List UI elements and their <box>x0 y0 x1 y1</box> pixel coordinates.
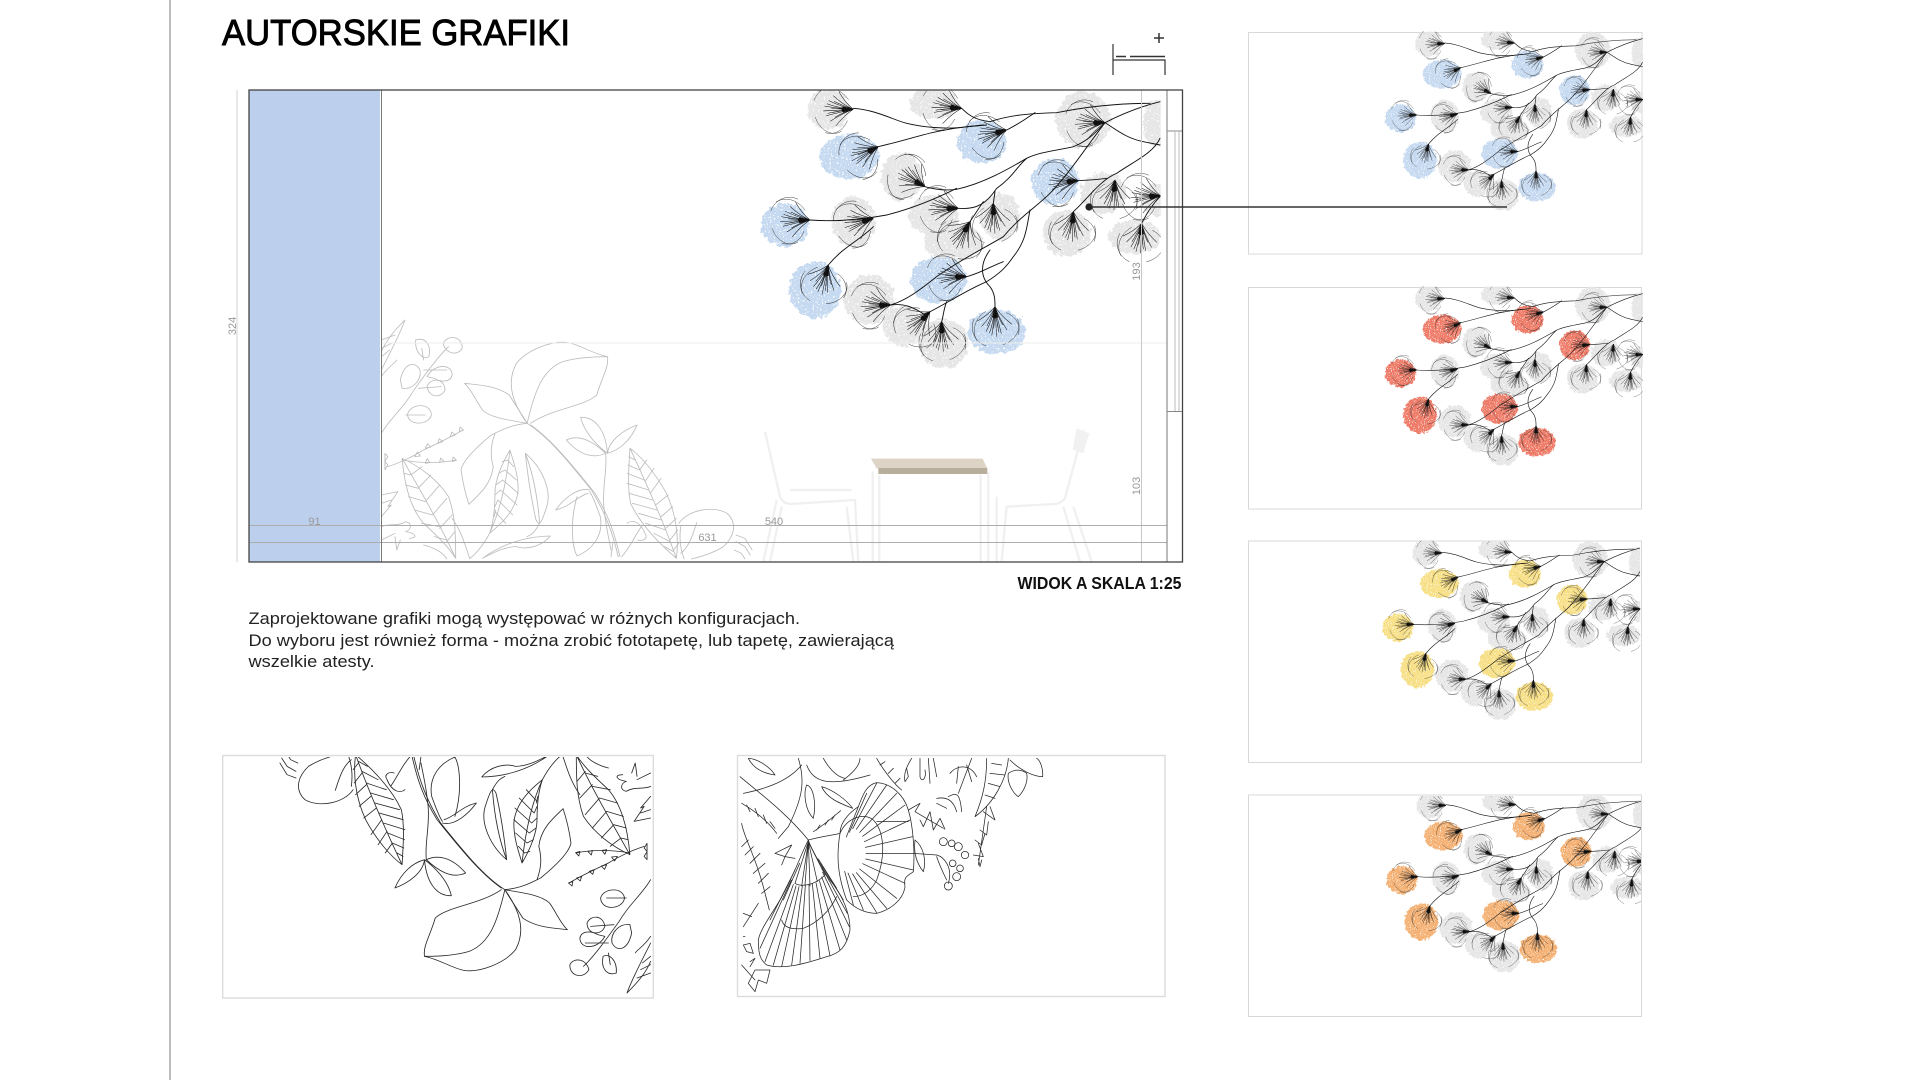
text block: description: wszelkie atesty. <box>247 652 374 671</box>
leaf line art <box>280 754 651 993</box>
callout: line linking drawing to variant <box>1085 203 1507 211</box>
chairs and table <box>763 428 1092 562</box>
dimension labels: 103 <box>1131 477 1143 495</box>
blue wall section <box>249 90 380 562</box>
text block: description: Do wyboru jest również forma - można zrobić fototapetę, lub tapetę, zawierającą <box>248 631 895 650</box>
icon: section marker with plus sign <box>1113 33 1165 75</box>
dimension labels <box>227 262 1143 544</box>
preview frame <box>1248 32 1642 254</box>
dimension labels: 91 <box>308 516 321 528</box>
sketch frame <box>223 756 653 998</box>
panel: orange variant <box>1248 788 1651 1016</box>
branch <box>1385 281 1650 466</box>
panel: blue variant <box>1248 26 1650 254</box>
branch <box>1385 26 1650 211</box>
title: AUTORSKIE GRAFIKI <box>222 12 570 53</box>
dimension labels: 631 <box>698 532 717 544</box>
dimension lines <box>237 90 1183 562</box>
preview frame <box>1248 541 1642 762</box>
panel: leaf sketch, right <box>738 756 1165 996</box>
branch <box>1386 788 1651 972</box>
dimension labels: 540 <box>765 516 783 528</box>
dimension labels: 324 <box>227 317 239 335</box>
panel: wall elevation drawing <box>227 82 1183 562</box>
text block: description: Zaprojektowane grafiki mogą występować w różnych konfiguracjach. <box>248 609 800 628</box>
panel: red variant <box>1248 281 1650 509</box>
sketch frame <box>738 756 1165 996</box>
frame outline <box>249 90 1182 562</box>
panel: yellow variant <box>1248 536 1647 762</box>
ginkgo and sprigs line art <box>740 758 1043 992</box>
caption: scale: WIDOK A SKALA 1:25 <box>1018 573 1182 593</box>
blossom branch, blue variant <box>761 82 1172 368</box>
panel: leaf sketch, left <box>223 754 653 998</box>
frame fill <box>249 90 1183 562</box>
dimension labels: 193 <box>1131 262 1143 281</box>
preview frame <box>1248 288 1642 509</box>
text block: description <box>247 609 895 671</box>
preview frame <box>1248 795 1642 1016</box>
grey plant mural <box>381 320 752 559</box>
page margin line <box>169 0 171 1080</box>
branch <box>1382 536 1647 720</box>
